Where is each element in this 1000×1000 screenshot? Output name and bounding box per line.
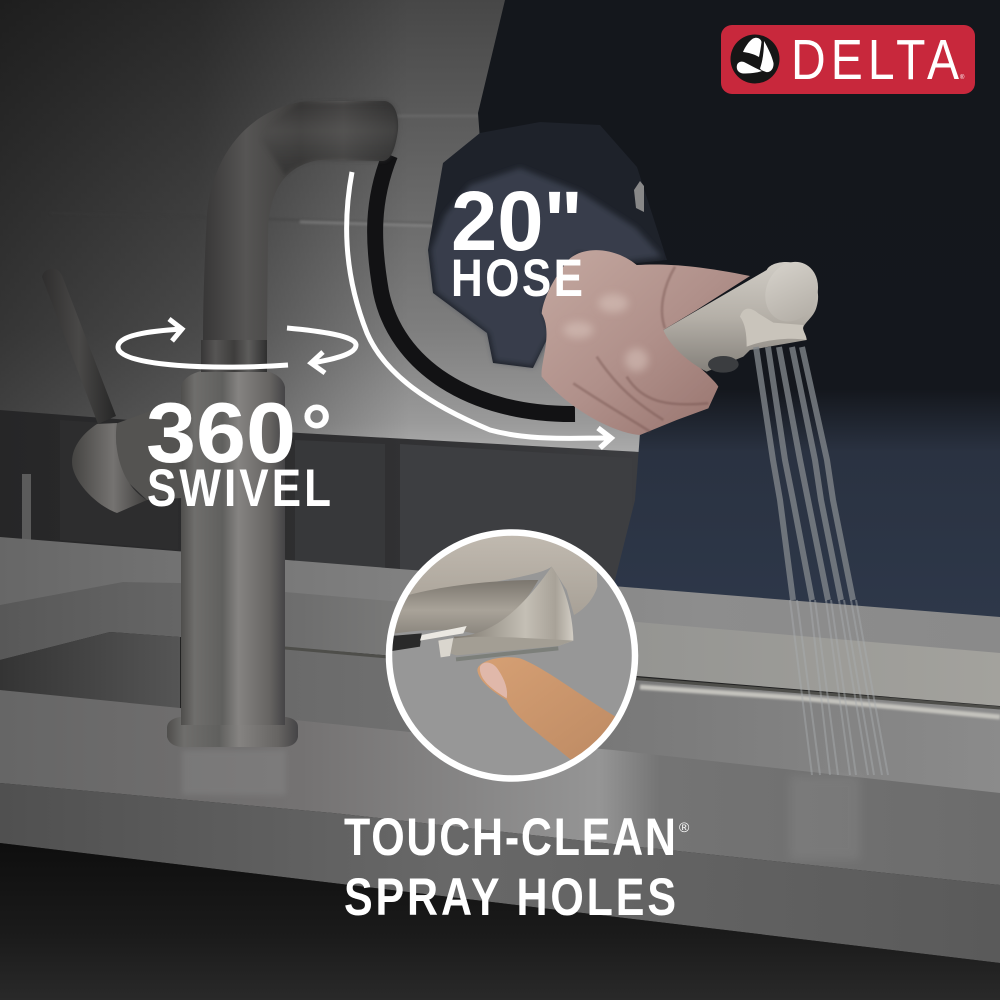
inset contents	[392, 536, 615, 760]
fingernail	[480, 663, 507, 698]
faucet collar	[201, 340, 267, 372]
nozzle reflection	[420, 626, 467, 641]
logo mark disc	[730, 34, 780, 84]
water reflection	[790, 775, 860, 860]
degree symbol: °	[301, 388, 332, 476]
nozzle barrel	[383, 580, 538, 635]
hand	[542, 250, 828, 435]
spray holes	[456, 648, 558, 659]
spray head body	[663, 262, 818, 372]
label: touch-clean: TOUCH-CLEAN	[344, 809, 676, 867]
sweater cuff outer	[428, 122, 667, 368]
label: 360 degrees: 360	[146, 386, 296, 481]
inset background	[389, 532, 635, 778]
logo badge	[721, 25, 975, 94]
countertop top surface	[0, 690, 1000, 885]
label: hose: HOSE	[451, 249, 583, 308]
below counter	[0, 843, 1000, 1000]
inset detail circle	[383, 523, 635, 778]
sink basin	[0, 632, 180, 710]
dark hose tip	[392, 633, 422, 651]
faucet	[42, 101, 398, 795]
handle hub	[115, 410, 182, 500]
water spray	[756, 347, 888, 775]
spray head button	[708, 356, 739, 373]
wall gap behind arm	[634, 181, 644, 212]
finger creases	[573, 267, 708, 432]
label: spray holes: SPRAY HOLES	[344, 869, 676, 927]
background: wall shelf lines	[50, 116, 480, 226]
knuckle highlights	[563, 294, 648, 372]
rim highlight	[640, 687, 1000, 717]
logo registered mark: ®	[960, 74, 965, 81]
handle body	[72, 423, 147, 513]
pull nozzle	[453, 567, 573, 648]
spray head nozzle	[740, 309, 807, 347]
label: 360 swivel arrows	[118, 319, 356, 373]
spray ring	[450, 637, 573, 655]
counter front face	[0, 783, 1000, 963]
inset ring	[389, 532, 635, 778]
thin falling water	[790, 600, 888, 775]
rim dark line	[285, 648, 1000, 708]
hand shape	[542, 250, 750, 435]
sweater torso	[478, 0, 1000, 628]
spout tip shading	[262, 101, 398, 175]
background: kitchen wall	[0, 0, 660, 470]
handle lever	[42, 269, 116, 424]
background: dark cabinets	[0, 410, 640, 625]
registered mark: ®	[679, 819, 690, 835]
finger	[477, 657, 618, 762]
label: swivel: SWIVEL	[147, 459, 331, 518]
sink far wall	[285, 648, 1000, 795]
spray head end cap	[756, 253, 828, 330]
faucet body	[181, 371, 285, 725]
faucet reflection	[182, 750, 286, 795]
hose	[375, 155, 575, 414]
Delta logo	[721, 25, 975, 94]
spray face	[438, 638, 453, 657]
background: wall shading	[0, 0, 660, 470]
logo wordmark: DELTA	[791, 28, 959, 92]
faucet spout	[203, 101, 398, 340]
label: 20 inch hose arrow	[347, 172, 611, 448]
faucet base	[167, 717, 298, 747]
sweater cuff lit inner	[431, 168, 662, 366]
counter rim	[0, 582, 1000, 706]
countertop back surface	[0, 537, 1000, 665]
thick water streams	[756, 347, 853, 600]
logo mark petals	[737, 38, 774, 74]
nozzle top cap	[409, 536, 598, 615]
label: 20 inch: 20"	[451, 174, 583, 268]
